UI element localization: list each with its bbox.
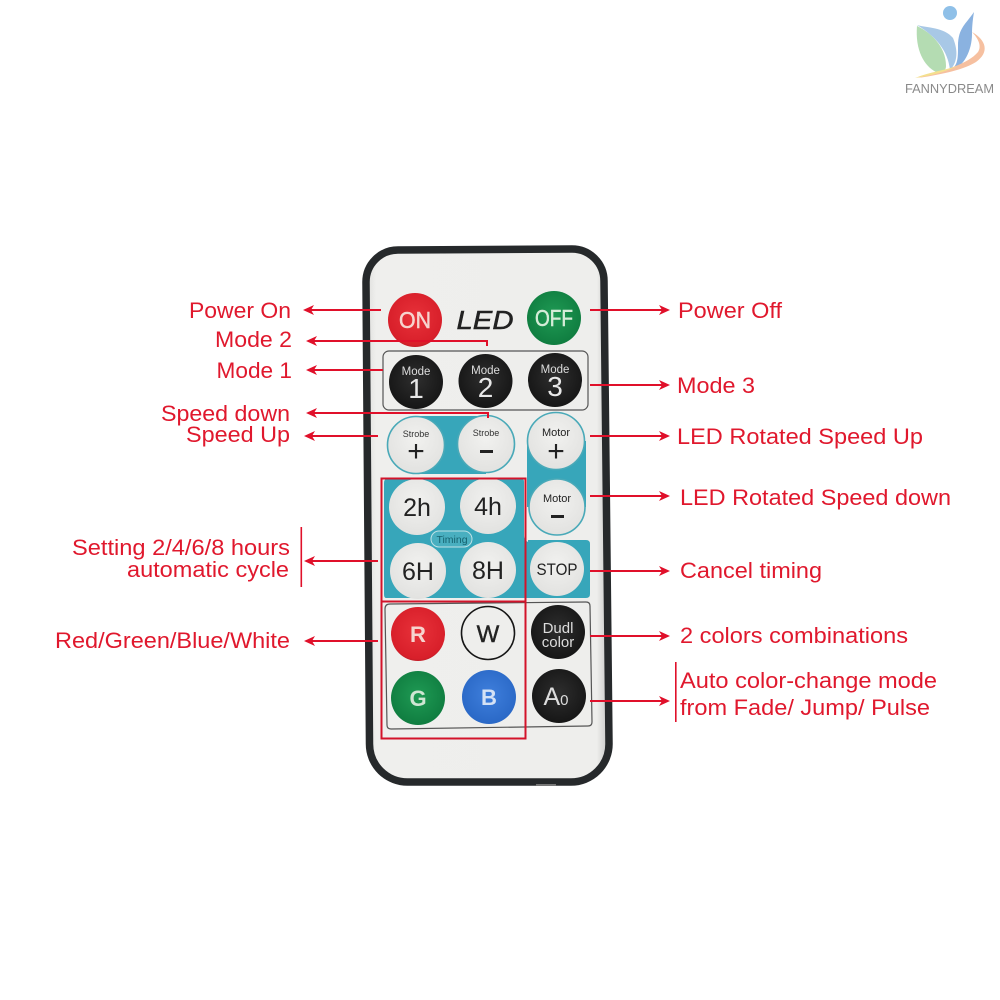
mode group outline [383, 351, 588, 410]
label: Mode 1: Mode 1 [216, 358, 292, 383]
Timing badge [431, 531, 472, 547]
button: A0: A0 [543, 683, 569, 711]
label: Speed Up: Speed Up [186, 422, 290, 447]
button: OFF [527, 291, 581, 345]
button: ON: ON [399, 307, 431, 333]
label: RGBW: Red/Green/Blue/White [55, 628, 290, 653]
label: from Fade/ Jump/ Pulse: from Fade/ Jump/ Pulse [680, 695, 930, 720]
button: W [462, 606, 514, 660]
arrow: Cancel timing [590, 566, 670, 576]
arrow: Auto color-change [590, 662, 677, 722]
button: A0 [532, 669, 586, 723]
button: Strobe plus [388, 416, 444, 474]
button: Strobe plus: Strobe [403, 429, 429, 439]
button: Motor plus: + [547, 435, 565, 468]
remote control body [366, 249, 609, 786]
button: 6H [390, 543, 446, 599]
label: Auto color-change mode: Auto color-change mode [680, 668, 937, 693]
button: 2h [389, 479, 445, 535]
label: LED Rotated Speed Up: LED Rotated Speed Up [677, 424, 923, 449]
arrow: Power On [303, 305, 381, 315]
label: Speed down: Speed down [161, 401, 290, 426]
button: 4h: 4h [474, 493, 502, 521]
arrow: LED Rotated Speed Up [590, 431, 670, 441]
button: G: G [409, 686, 427, 711]
arrow: Mode 1 [306, 365, 383, 375]
logo: FANNYDREAM [905, 6, 994, 96]
button: B [462, 670, 516, 724]
button: STOP: STOP [536, 561, 578, 579]
button: OFF: OFF [535, 305, 573, 331]
label: Mode 3: Mode 3 [677, 373, 755, 398]
button: Motor plus [528, 412, 584, 470]
colour group outline [385, 602, 592, 729]
Timing badge: Timing [436, 534, 468, 546]
teal panels [384, 416, 590, 598]
button: 2h: 2h [403, 494, 431, 522]
label: automatic cycle: automatic cycle [127, 557, 289, 582]
button: STOP [530, 542, 584, 596]
button: Mode 2: Mode [471, 365, 500, 377]
label: 2 colors combinations: 2 colors combinations [680, 623, 908, 648]
button: R [391, 607, 445, 661]
arrow: Mode 2 [306, 336, 488, 346]
label: LED Rotated Speed down: LED Rotated Speed down [680, 485, 951, 510]
button: Strobe minus [458, 416, 514, 472]
button: Dudl color [531, 605, 585, 659]
label: Power Off: Power Off [678, 298, 783, 323]
button: Strobe plus: + [407, 435, 425, 468]
button: B: B [481, 685, 497, 710]
arrow: 2 colors [590, 631, 670, 641]
button: 6H: 6H [402, 558, 434, 586]
button: Mode 3 [528, 353, 582, 407]
arrow: Speed down [306, 408, 489, 418]
button: W: W [477, 621, 500, 648]
arrow: RGBW [304, 636, 378, 646]
button: Dudl color: color [542, 634, 574, 651]
logo wordmark: FANNYDREAM [905, 82, 994, 96]
button: Mode 2: 2 [478, 372, 493, 403]
button: ON [388, 293, 442, 347]
arrow: LED Rotated Speed down [590, 491, 670, 501]
button: Motor minus: Motor [543, 493, 571, 505]
button: 8H: 8H [472, 557, 504, 585]
button: Mode 1: 1 [408, 373, 424, 404]
LED wordmark: LED [456, 305, 514, 335]
label: Cancel timing: Cancel timing [680, 558, 822, 583]
button: Motor plus: Motor [542, 427, 570, 439]
arrow: Mode 3 [590, 380, 670, 390]
button: Strobe minus: Strobe [473, 428, 499, 438]
button: Mode 3: 3 [547, 371, 563, 402]
button: 4h [460, 478, 516, 534]
button: G [391, 671, 445, 725]
button: Mode 1: Mode [402, 366, 430, 378]
button: 8H [460, 542, 516, 598]
button: Mode 1 [389, 355, 443, 409]
button: Mode 3: Mode [541, 364, 569, 376]
button: Dudl color: Dudl [543, 620, 573, 637]
button: R: R [410, 622, 426, 647]
label: Mode 2: Mode 2 [215, 327, 292, 352]
button: Mode 2 [458, 354, 512, 408]
button: Motor minus [529, 479, 585, 535]
label: Power On: Power On [189, 298, 291, 323]
red highlight: timing buttons [382, 478, 526, 602]
red highlight: colour buttons [382, 602, 526, 738]
label: timing: Setting 2/4/6/8 hours [72, 535, 290, 560]
arrow: Speed Up [304, 431, 378, 441]
arrow: timing [300, 527, 378, 587]
arrow: Power Off [590, 305, 670, 315]
